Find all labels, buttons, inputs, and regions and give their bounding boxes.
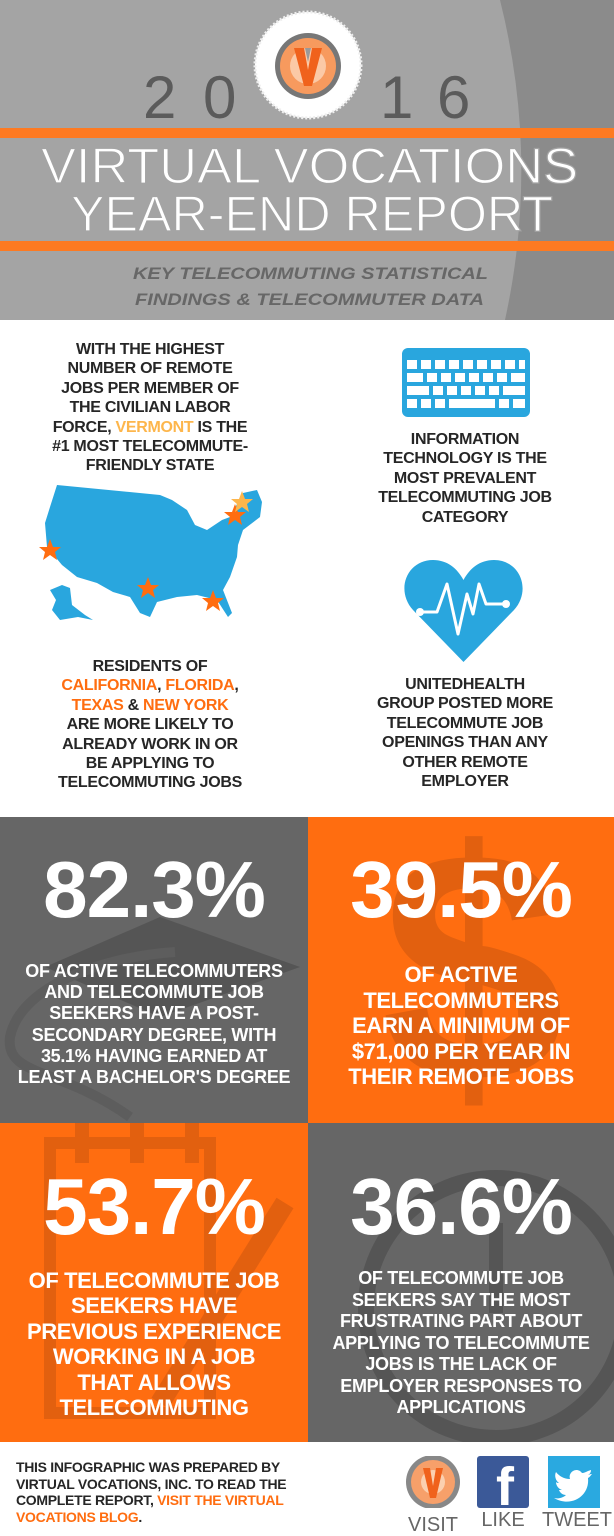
icon: twitter tweet <box>542 1456 612 1531</box>
text: residents: CALIFORNIA, FLORIDA, <box>61 677 239 694</box>
panel: 39.5%: EARN A MINIMUM OF <box>352 1013 570 1038</box>
text: information technology: INFORMATION <box>411 431 519 448</box>
icon: visit: VISIT <box>408 1514 458 1536</box>
year digits: 1 <box>380 64 413 131</box>
title: VIRTUAL VOCATIONS <box>41 138 578 194</box>
panel: 82.3%: 35.1% HAVING EARNED AT <box>41 1046 267 1066</box>
panel: 36.6%: JOBS IS THE LACK OF <box>365 1354 557 1374</box>
panel: 36.6%: SEEKERS SAY THE MOST <box>352 1290 570 1310</box>
icon: heart <box>404 560 523 662</box>
icon: clock (bg) <box>358 1170 614 1442</box>
text: residents <box>58 658 242 791</box>
panel: 36.6%: EMPLOYER RESPONSES TO <box>340 1376 582 1396</box>
header: YEAR-END REPORT <box>71 186 553 242</box>
text: vermont: THE CIVILIAN LABOR <box>70 399 230 416</box>
text: unitedhealth: OTHER REMOTE <box>402 754 528 771</box>
panel: 53.7%: THAT ALLOWS <box>77 1370 231 1395</box>
icon: facebook like <box>477 1456 529 1531</box>
panel: 82.3%: SEEKERS HAVE A POST- <box>49 1003 259 1023</box>
panel: 53.7%: PREVIOUS EXPERIENCE <box>27 1319 281 1344</box>
icon: notepad (bg) <box>44 1123 294 1419</box>
header <box>0 0 614 320</box>
year digits: 0 <box>203 64 236 131</box>
text: residents: RESIDENTS OF <box>93 658 207 675</box>
text: unitedhealth: TELECOMMUTE JOB <box>387 715 543 732</box>
panel: 39.5%: 39.5% <box>350 845 572 934</box>
text: residents: TELECOMMUTING JOBS <box>58 774 242 791</box>
panel: 39.5%: OF ACTIVE <box>405 962 517 987</box>
panel: 36.6% <box>308 1123 614 1442</box>
panel: 82.3%: LEAST A BACHELOR'S DEGREE <box>18 1067 290 1087</box>
text: vermont: FORCE, VERMONT IS THE <box>53 419 247 436</box>
panel: 82.3%: AND TELECOMMUTE JOB <box>44 982 264 1002</box>
panel: 53.7%: 53.7% <box>43 1162 265 1251</box>
icon: keyboard <box>402 348 530 417</box>
text: unitedhealth: EMPLOYER <box>421 773 509 790</box>
text: unitedhealth: UNITEDHEALTH <box>405 676 525 693</box>
text: vermont: NUMBER OF REMOTE <box>68 360 232 377</box>
text: vermont: JOBS PER MEMBER OF <box>61 380 239 397</box>
text: information technology: TELECOMMUTING JOB <box>378 489 552 506</box>
panel: 53.7%: SEEKERS HAVE <box>71 1293 237 1318</box>
text: information technology: CATEGORY <box>422 509 508 526</box>
panel: 36.6%: 36.6% <box>350 1162 572 1251</box>
text: vermont: WITH THE HIGHEST <box>76 341 224 358</box>
panel: 82.3% <box>0 817 308 1123</box>
icon: facebook like: LIKE <box>481 1509 525 1531</box>
text: vermont: FRIENDLY STATE <box>86 457 214 474</box>
text: residents: BE APPLYING TO <box>86 755 214 772</box>
text: information technology <box>378 431 552 526</box>
panel: 39.5%: THEIR REMOTE JOBS <box>348 1064 574 1089</box>
panel: 82.3%: 82.3% <box>43 845 265 934</box>
year digits: 6 <box>437 64 470 131</box>
header: FINDINGS & TELECOMMUTER DATA <box>135 290 484 309</box>
icon: graduation cap (bg) <box>5 917 300 1120</box>
panel: 82.3%: SECONDARY DEGREE, WITH <box>32 1025 276 1045</box>
map with stars <box>39 485 262 620</box>
subtitle: KEY TELECOMMUTING STATISTICAL <box>133 264 488 283</box>
panel: 36.6%: OF TELECOMMUTE JOB <box>358 1268 564 1288</box>
panel: 39.5%: $71,000 PER YEAR IN <box>352 1038 570 1064</box>
text: unitedhealth <box>377 676 553 790</box>
icon: twitter tweet: TWEET <box>542 1509 612 1531</box>
text: information technology: TECHNOLOGY IS THE <box>383 450 547 467</box>
panel: 53.7% <box>0 1123 308 1442</box>
text: residents: ARE MORE LIKELY TO <box>67 716 233 733</box>
text: residents: ALREADY WORK IN OR <box>62 736 238 753</box>
panel: 36.6%: APPLYING TO TELECOMMUTE <box>332 1332 590 1352</box>
panel: 39.5% <box>308 817 614 1123</box>
text: vermont <box>52 341 248 474</box>
text: information technology: MOST PREVALENT <box>394 470 536 487</box>
panel: 36.6%: FRUSTRATING PART ABOUT <box>340 1311 582 1331</box>
text: residents: TEXAS & NEW YORK <box>72 697 228 714</box>
text: vermont: #1 MOST TELECOMMUTE- <box>52 438 248 455</box>
panel: 36.6%: APPLICATIONS <box>396 1397 526 1417</box>
logo <box>255 12 361 118</box>
year digits <box>143 64 470 131</box>
text: unitedhealth: OPENINGS THAN ANY <box>382 734 548 751</box>
footer text: THIS INFOGRAPHIC WAS PREPARED BY VIRTUAL VOCATIONS, INC. TO READ THE COMPLETE REPORT, VISIT THE VIRTUAL VOCATIONS BLOG. <box>16 1459 286 1525</box>
panel: 53.7%: WORKING IN A JOB <box>53 1344 255 1369</box>
panel: 82.3%: OF ACTIVE TELECOMMUTERS <box>25 961 283 981</box>
year digits: 2 <box>143 64 176 131</box>
panel: 53.7%: TELECOMMUTING <box>59 1395 249 1420</box>
text: unitedhealth: GROUP POSTED MORE <box>377 695 553 712</box>
panel: 39.5%: TELECOMMUTERS <box>363 988 559 1012</box>
icon: visit <box>406 1456 460 1536</box>
panel: 53.7%: OF TELECOMMUTE JOB <box>29 1268 279 1293</box>
